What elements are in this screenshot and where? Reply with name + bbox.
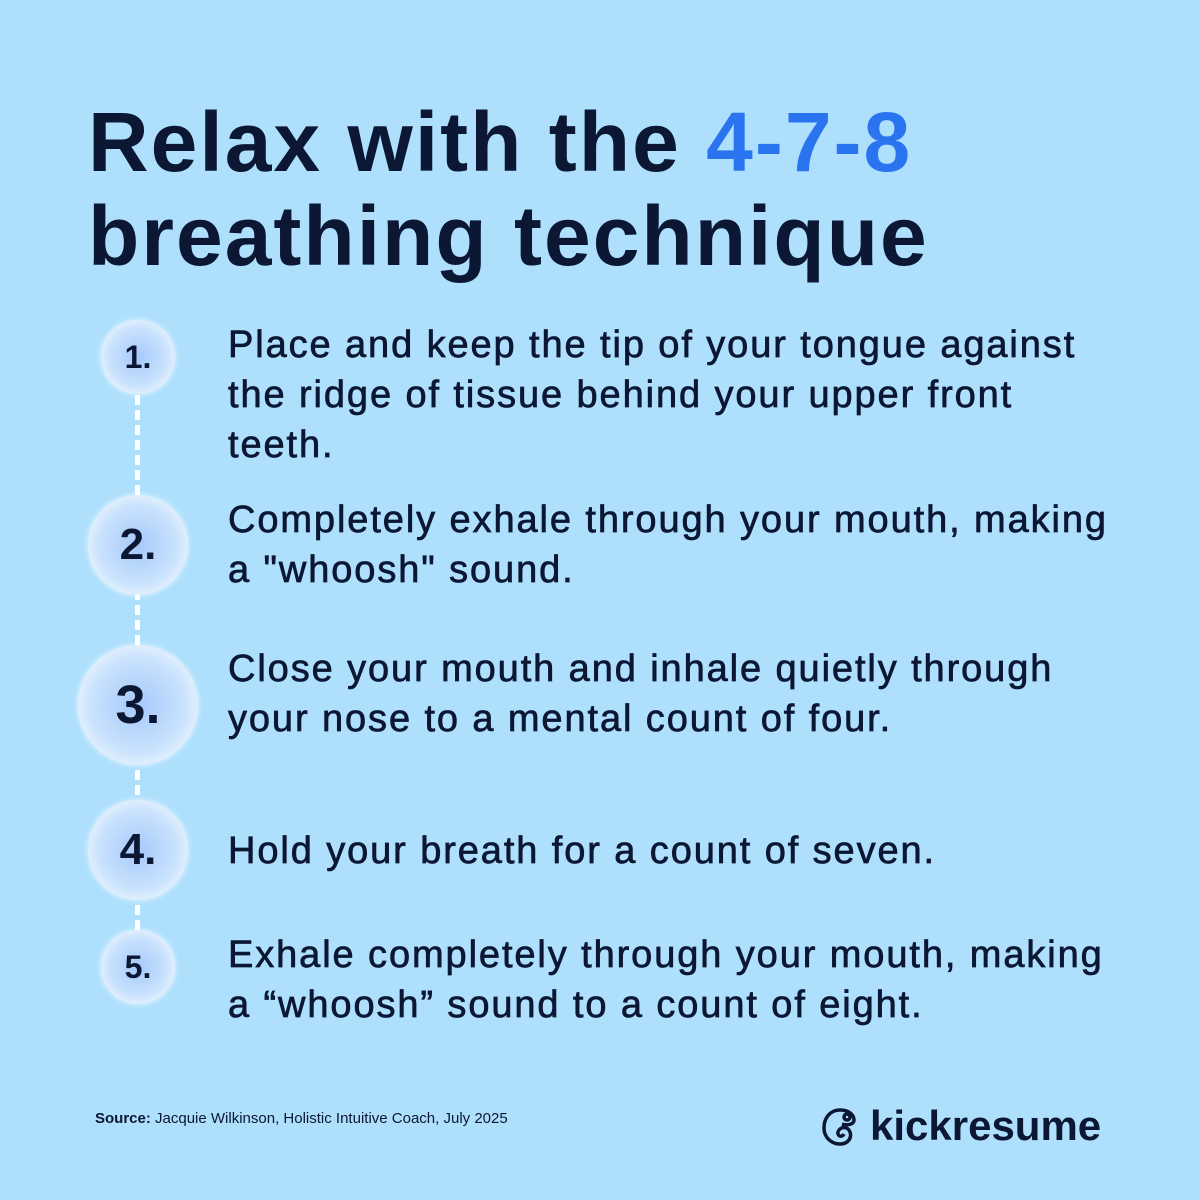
step 1 text [228, 324, 1076, 466]
icon: chameleon [822, 1108, 856, 1146]
step 4 circle: 4. [120, 825, 156, 874]
step 1 circle: 1. [125, 338, 151, 374]
step 5 text: Exhale completely through your mouth, making [228, 934, 1104, 976]
step 5 circle: 5. [125, 948, 151, 984]
connector line [135, 395, 140, 945]
step 3 circle: 3. [115, 675, 161, 735]
step 1 circle [101, 320, 175, 394]
step 3 circle [78, 645, 198, 765]
step 4 text: Hold your breath for a count of seven. [228, 830, 936, 872]
step 5 text [228, 934, 1104, 1026]
title: breathing technique [88, 189, 929, 283]
step 5 circle [101, 930, 175, 1004]
source: Source: Jacquie Wilkinson, Holistic Intuitive Coach, July 2025 [95, 1110, 508, 1127]
title [88, 95, 929, 283]
step 1 text: Place and keep the tip of your tongue against [228, 324, 1076, 366]
step 4 circle [88, 800, 188, 900]
step 1 text: teeth. [228, 424, 334, 466]
step 2 circle: 2. [120, 520, 156, 569]
step 2 text [228, 499, 1108, 591]
wordmark: kickresume [870, 1102, 1101, 1149]
step 2 text: a "whoosh" sound. [228, 549, 575, 591]
step 3 text: your nose to a mental count of four. [228, 698, 892, 740]
logo [822, 1102, 1101, 1149]
step 2 circle [88, 495, 188, 595]
title: Relax with the 4-7-8 [88, 95, 912, 189]
step 5 text: a “whoosh” sound to a count of eight. [228, 984, 924, 1026]
step 1 text: the ridge of tissue behind your upper front [228, 374, 1013, 416]
step 3 text [228, 648, 1053, 740]
step 3 text: Close your mouth and inhale quietly through [228, 648, 1053, 690]
step 2 text: Completely exhale through your mouth, making [228, 499, 1108, 541]
